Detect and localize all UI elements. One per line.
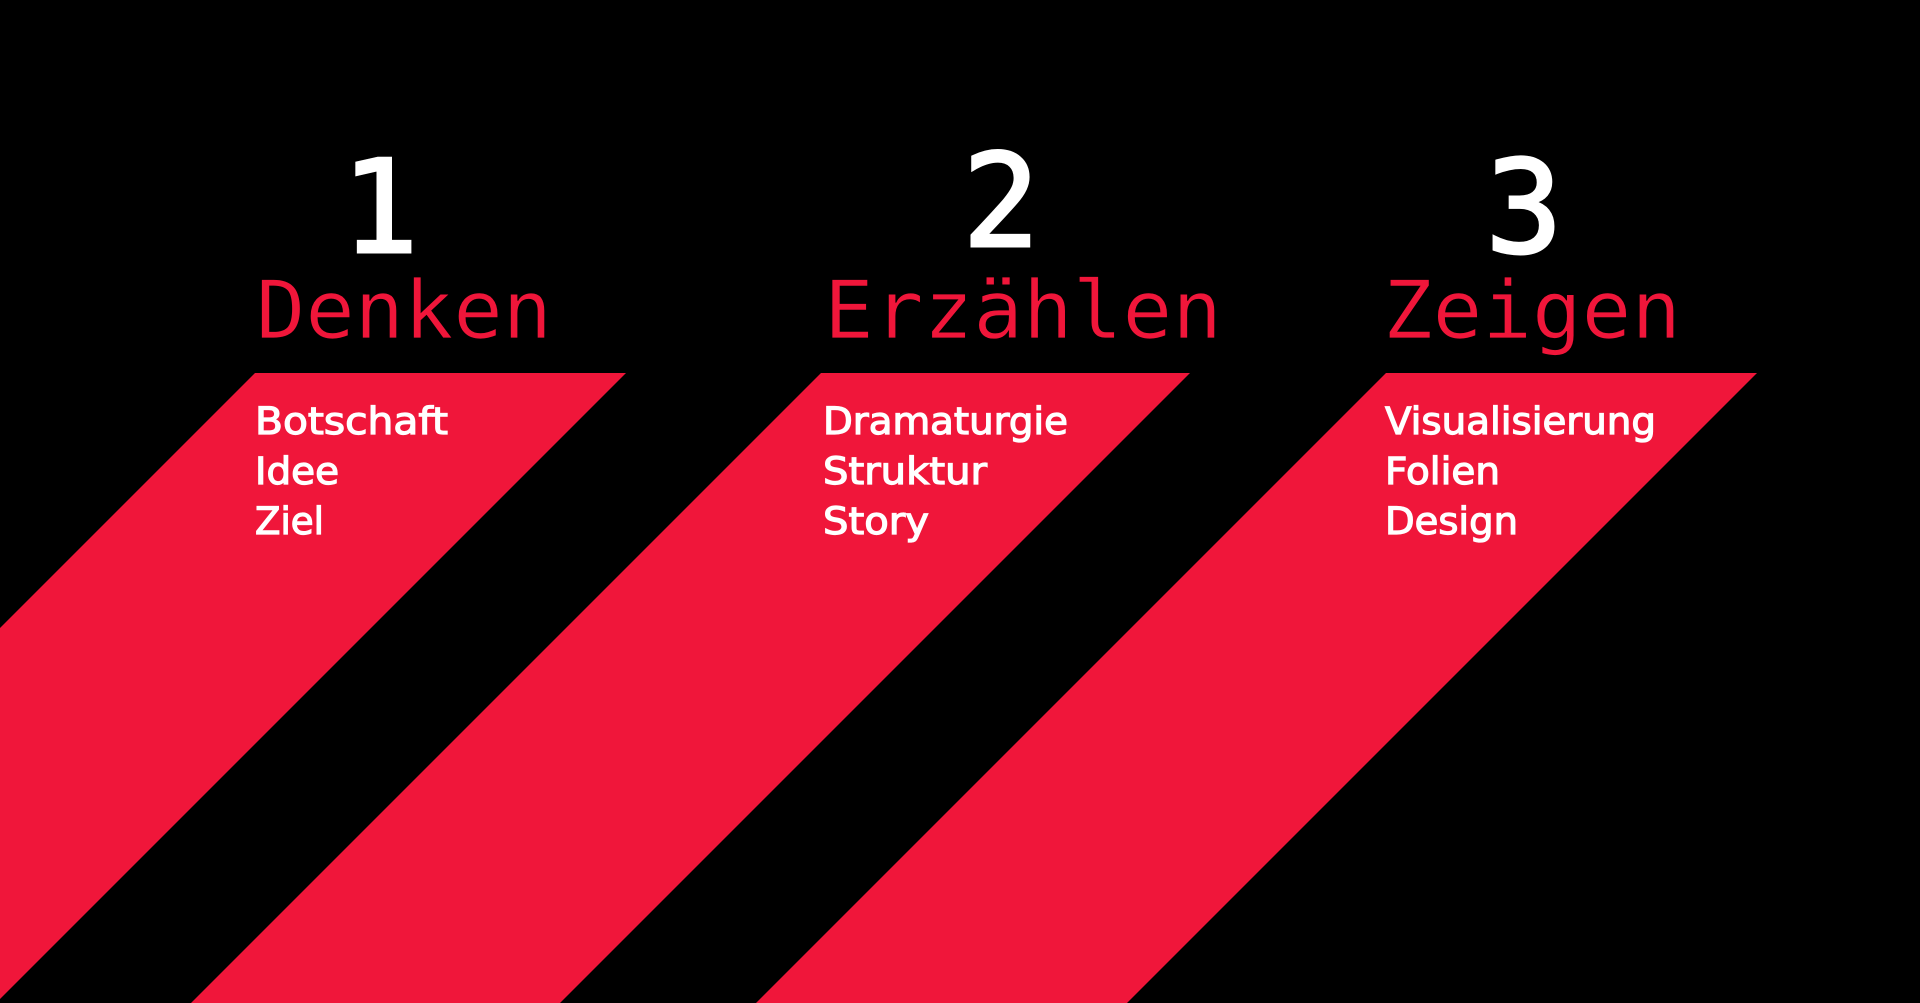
text block: Botschaft, Idee, Ziel [255, 400, 448, 543]
text block: Botschaft, Idee, Ziel: Idee [255, 450, 339, 493]
diagonal band 2 [191, 373, 1190, 1003]
number 3: 3 [1485, 134, 1563, 283]
panel: step 2 Erzählen [191, 128, 1222, 1003]
text block: Visualisierung, Folien, Design: Design [1385, 500, 1518, 543]
text block: Dramaturgie, Struktur, Story: Struktur [823, 450, 988, 493]
diagonal band 3 [756, 373, 1757, 1003]
diagonal band 1 [0, 373, 626, 1003]
number 2: 2 [962, 128, 1040, 277]
text block: Dramaturgie, Struktur, Story: Story [823, 500, 929, 543]
text block: Visualisierung, Folien, Design: Folien [1385, 450, 1500, 493]
text block: Botschaft, Idee, Ziel: Botschaft [255, 400, 448, 443]
text block: Visualisierung, Folien, Design: Visualisierung [1385, 400, 1656, 443]
number 1: 1 [341, 134, 419, 283]
text block: Visualisierung, Folien, Design [1385, 400, 1656, 543]
text block: Dramaturgie, Struktur, Story [823, 400, 1068, 543]
text block: Botschaft, Idee, Ziel: Ziel [255, 500, 324, 543]
heading: Zeigen: Zeigen [1383, 264, 1681, 357]
heading: Erzählen: Erzählen [824, 264, 1222, 357]
heading: Denken: Denken [256, 264, 552, 357]
text block: Dramaturgie, Struktur, Story: Dramaturgie [823, 400, 1068, 443]
panel: step 1 Denken [0, 134, 626, 1003]
panel: step 3 Zeigen [756, 134, 1757, 1003]
